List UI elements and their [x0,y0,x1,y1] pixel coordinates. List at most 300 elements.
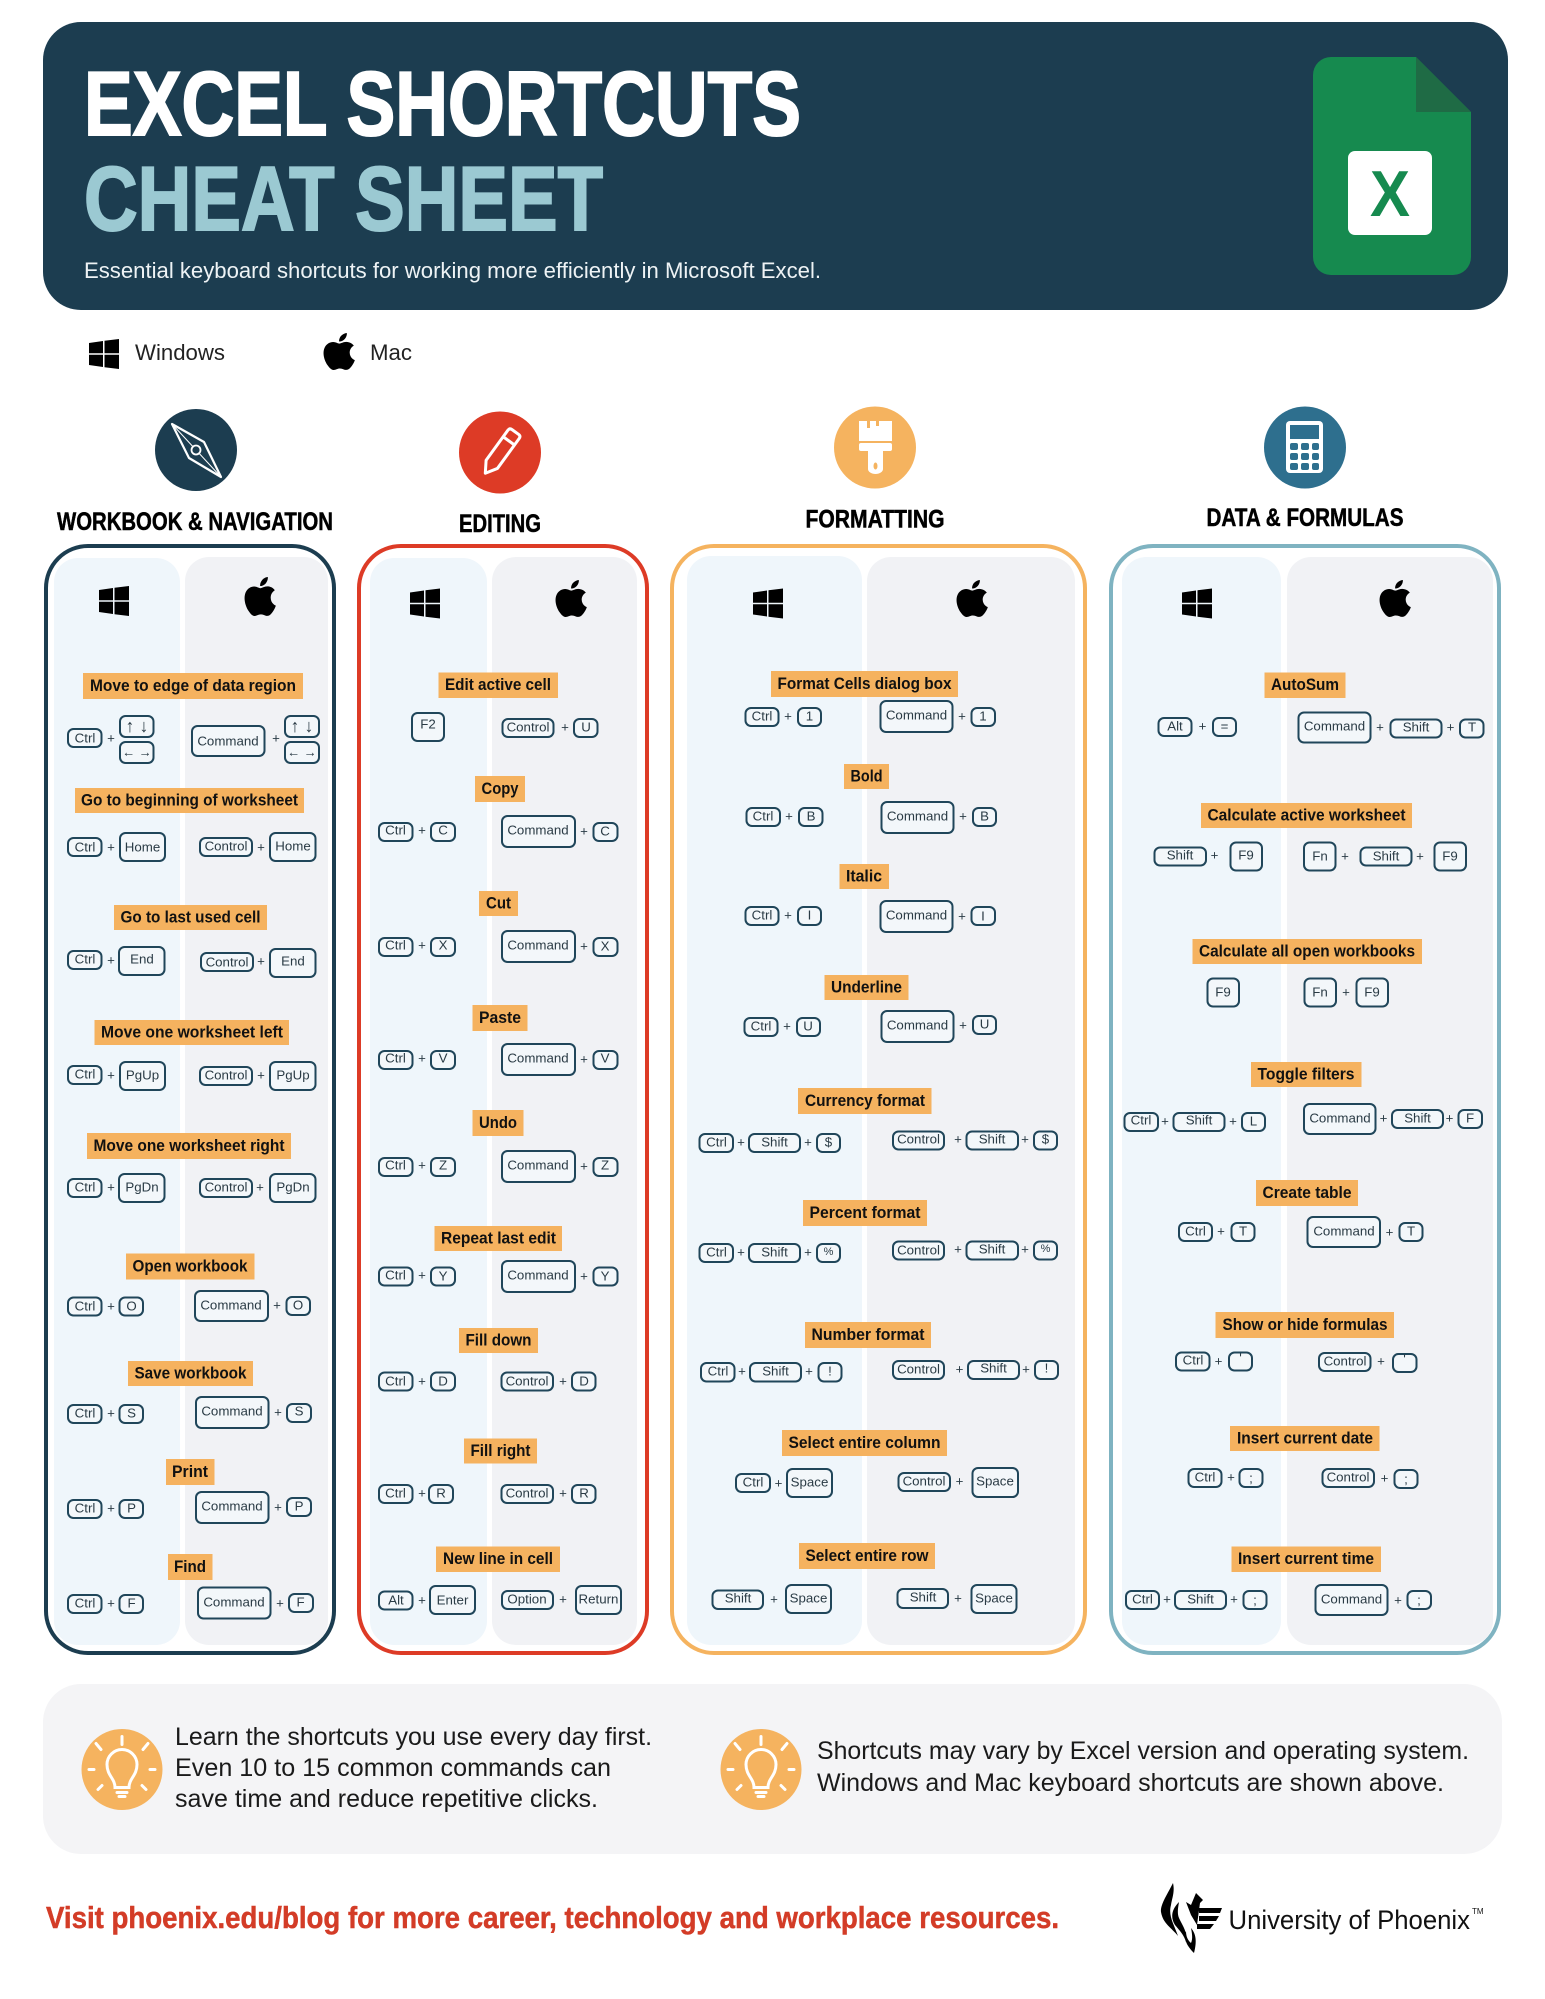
shortcut: format cells dialog box: + [784,708,792,724]
legend: windows and mac: Mac [370,340,412,365]
shortcut: calculate active worksheet: Shift [1373,848,1400,864]
shortcut: save workbook: S [295,1404,304,1418]
shortcut: move to edge of data region: ↑ ↓ [125,716,149,736]
shortcut: format cells dialog box: Command [886,708,947,722]
shortcut: autosum: = [1221,718,1229,734]
shortcut: copy: + [580,824,588,838]
shortcut: bold: + [785,808,793,824]
shortcut: insert current date: ; [1249,1470,1253,1486]
shortcut: fill right [379,1438,596,1503]
tip text 2 [817,1737,1469,1797]
shortcut: toggle filters: + [1161,1114,1169,1128]
icon: windows [1182,588,1212,618]
shortcut: save workbook: Command [201,1404,263,1418]
shortcut: cut: Cut [486,894,511,912]
heading: formatting: FORMATTING [806,506,944,534]
shortcut: number format: + [738,1364,746,1378]
shortcut: fill down: Ctrl [385,1374,406,1388]
tips panel [43,1684,1502,1854]
shortcut: number format: Shift [762,1364,789,1378]
shortcut: copy: C [600,824,610,838]
shortcut: show or hide formulas: ' [1239,1350,1242,1366]
heading: data and formulas: DATA & FORMULAS [1206,504,1404,532]
shortcut: repeat last edit [379,1226,618,1292]
shortcut: bold [746,764,996,833]
shortcut: repeat last edit: Y [601,1268,610,1284]
shortcut: undo: Undo [479,1114,517,1132]
shortcut: fill right: Fill right [470,1442,531,1460]
shortcut: fill down: + [559,1374,567,1388]
shortcut: fill down: + [418,1374,426,1388]
shortcut: calculate all open workbooks: F9 [1364,984,1380,1000]
shortcut: currency format: Currency format [805,1092,925,1110]
icon: compass [155,409,237,491]
shortcut: bold: Ctrl [753,808,773,824]
shortcut: select entire column: Ctrl [743,1474,763,1490]
shortcut: percent format: + [804,1244,812,1260]
shortcut: calculate all open workbooks [1192,939,1422,1006]
shortcut: paste: Ctrl [385,1050,406,1066]
shortcut: move one worksheet right: + [256,1180,264,1194]
shortcut: insert current date: + [1227,1470,1235,1484]
shortcut: move one worksheet left: + [107,1068,115,1082]
shortcut: save workbook: + [107,1406,115,1420]
shortcut: go to last used cell: End [130,952,154,966]
shortcut: cut: Ctrl [385,938,406,952]
shortcut: find: F [127,1596,136,1610]
legend: windows and mac: Windows [135,340,225,365]
shortcut: move to edge of data region: ← → [122,744,152,760]
shortcut: print [68,1459,311,1523]
shortcut: currency format [700,1088,1057,1152]
shortcut: go to last used cell: Ctrl [75,952,95,966]
shortcut: move to edge of data region: Move to edge of data region [90,677,296,695]
shortcut: autosum: AutoSum [1271,676,1339,694]
shortcut: copy: + [418,822,426,838]
subtitle: Essential keyboard shortcuts for working more efficiently in Microsoft Excel. [84,258,821,283]
shortcut: select entire column: Space [976,1474,1014,1488]
shortcut: calculate active worksheet [1154,803,1466,870]
shortcut: percent format: + [1021,1242,1029,1256]
shortcut: fill down [379,1328,596,1390]
shortcut: undo: + [418,1158,426,1172]
shortcut: go to last used cell: + [257,954,265,968]
shortcut: currency format: + [954,1132,962,1146]
icon: windows [410,588,440,618]
shortcut: open workbook: + [107,1298,115,1314]
shortcut: bold: B [807,808,816,824]
shortcut: insert current date: + [1381,1470,1389,1486]
shortcut: autosum: + [1447,720,1455,734]
icon: pencil [459,412,541,494]
shortcut: move to edge of data region: Ctrl [75,730,95,746]
shortcut: toggle filters: Shift [1186,1112,1213,1128]
shortcut: go to beginning of worksheet: Home [125,840,160,854]
shortcut: percent format: Percent format [810,1204,921,1222]
shortcut: fill right: Ctrl [385,1486,406,1500]
shortcut: move one worksheet left: Control [205,1068,247,1082]
shortcut: number format: ! [1045,1360,1048,1376]
shortcut: new line in cell: Enter [437,1592,469,1608]
logo: university of phoenix: University of Phoenix [1228,1905,1470,1935]
shortcut: calculate active worksheet: Fn [1312,848,1328,864]
shortcut: save workbook: Save workbook [134,1364,247,1382]
shortcut: paste: V [601,1050,610,1066]
shortcut: create table: + [1386,1224,1394,1240]
shortcut: cut: Command [507,938,569,952]
shortcut: italic [746,864,995,932]
shortcut: open workbook: O [293,1298,303,1312]
shortcut: percent format: Ctrl [706,1244,727,1260]
shortcut: undo: Ctrl [385,1158,406,1172]
shortcut: show or hide formulas: + [1377,1354,1385,1368]
shortcut: currency format: + [737,1134,745,1150]
shortcut: bold: B [980,808,989,824]
shortcut: print: P [295,1498,304,1514]
shortcut: toggle filters: Shift [1404,1110,1431,1126]
shortcut: select entire column: Space [791,1474,828,1490]
shortcut: insert current date [1188,1426,1418,1488]
shortcut: create table: Ctrl [1185,1224,1206,1238]
shortcut: calculate active worksheet: F9 [1442,848,1458,864]
shortcut: insert current time: Ctrl [1132,1592,1153,1606]
shortcut: new line in cell: Option [507,1592,547,1606]
shortcut: move one worksheet left: PgUp [126,1068,159,1082]
shortcut: print: Command [201,1498,263,1514]
shortcut: print: Ctrl [75,1500,95,1516]
shortcut: select entire column: Select entire column [788,1434,940,1452]
shortcut: insert current time: ; [1253,1592,1257,1608]
icon: calculator [1264,406,1346,488]
shortcut: percent format: % [1041,1243,1051,1255]
shortcut: select entire row: + [770,1592,778,1606]
icon: excel file: X [1370,157,1410,230]
shortcut: open workbook: + [273,1298,281,1312]
shortcut: calculate active worksheet: + [1416,848,1424,864]
shortcut: underline [744,975,996,1042]
shortcut: paste: V [439,1050,448,1066]
shortcut: undo: Z [439,1158,447,1172]
shortcut: print: + [274,1500,282,1514]
shortcut: move one worksheet right: Control [205,1180,247,1194]
shortcut: go to beginning of worksheet: Ctrl [75,840,95,854]
icon: apple [1380,580,1411,617]
shortcut: number format [701,1322,1058,1382]
shortcut: save workbook [68,1361,311,1428]
tip text 1: save time and reduce repetitive clicks. [175,1785,598,1813]
shortcut: paste [379,1005,618,1075]
shortcut: cut: X [439,938,448,952]
shortcut: format cells dialog box: 1 [806,708,813,724]
shortcut: move one worksheet right: Ctrl [75,1180,95,1194]
shortcut: insert current time: Shift [1187,1592,1214,1606]
shortcut: percent format: Shift [979,1242,1006,1256]
shortcut: number format: + [956,1362,964,1376]
shortcut: new line in cell: Return [579,1592,618,1606]
panel: data and formulas [1111,546,1499,1653]
shortcut: move to edge of data region: ↑ ↓ [290,716,314,736]
shortcut: italic: Command [886,908,947,922]
shortcut: show or hide formulas: + [1215,1354,1223,1368]
shortcut: go to last used cell: Control [206,954,248,970]
title line 2: CHEAT SHEET [84,149,603,250]
shortcut: go to beginning of worksheet: Go to beginning of worksheet [81,792,298,810]
shortcut: calculate active worksheet: Shift [1167,848,1194,862]
shortcut: paste: Paste [479,1009,521,1027]
shortcut: number format: Number format [812,1326,925,1344]
tip text 1: Even 10 to 15 common commands can [175,1754,611,1782]
shortcut: format cells dialog box [746,671,995,732]
shortcut: edit active cell: Control [507,720,549,734]
shortcut: undo: Z [601,1158,609,1172]
shortcut: move one worksheet right [68,1133,316,1202]
shortcut: new line in cell: + [559,1592,567,1606]
shortcut: format cells dialog box: Format Cells dialog box [778,675,952,693]
shortcut: copy: Copy [482,780,519,798]
shortcut: fill right: + [559,1486,567,1500]
shortcut: go to last used cell: + [107,952,115,968]
shortcut: underline: Command [887,1018,948,1032]
shortcut: repeat last edit: + [418,1268,426,1282]
shortcut: create table: Create table [1262,1184,1352,1202]
shortcut: edit active cell: Edit active cell [445,676,551,694]
shortcut: repeat last edit: Ctrl [385,1268,406,1282]
shortcut: create table [1179,1180,1422,1247]
shortcut: currency format: + [1021,1132,1029,1146]
shortcut: select entire row: Space [790,1590,827,1606]
legend: windows and mac [89,333,412,370]
shortcut: select entire row: Shift [725,1590,752,1606]
shortcut: underline: U [980,1016,989,1032]
shortcut: underline: + [959,1018,967,1032]
shortcut: italic: I [808,908,811,922]
shortcut: insert current time: Command [1321,1592,1382,1606]
shortcut: calculate active worksheet: + [1211,848,1219,862]
shortcut: insert current time: + [1230,1592,1238,1606]
shortcut: calculate active worksheet: F9 [1238,848,1254,862]
shortcut: new line in cell [379,1546,621,1614]
shortcut: toggle filters: F [1466,1110,1474,1126]
shortcut: percent format: % [824,1246,834,1258]
heading: editing: EDITING [459,510,541,538]
shortcut: find: + [276,1596,284,1610]
shortcut: go to last used cell: Go to last used cell [120,908,260,926]
shortcut: autosum: Shift [1403,720,1430,734]
icon: apple [556,580,587,617]
shortcut: show or hide formulas: Control [1324,1354,1366,1368]
shortcut: percent format: + [954,1242,962,1256]
shortcut: fill down: Control [506,1374,548,1388]
shortcut: cut: + [418,938,426,952]
shortcut: show or hide formulas [1176,1312,1416,1372]
icon: light bulb 2 [720,1729,802,1810]
shortcut: open workbook: Ctrl [75,1298,95,1314]
shortcut: currency format: + [804,1134,812,1150]
shortcut: edit active cell: F2 [420,716,436,732]
shortcut: go to last used cell [68,905,316,977]
shortcut: number format: Control [897,1362,940,1376]
shortcut: underline: + [783,1018,791,1034]
shortcut: paste: + [580,1052,588,1066]
shortcut: find: F [296,1594,305,1610]
shortcut: format cells dialog box: Ctrl [752,708,772,724]
icon: windows [753,588,783,618]
shortcut: move to edge of data region [68,673,319,763]
shortcut: fill down: Fill down [466,1332,532,1350]
shortcut: select entire row: Space [975,1590,1013,1606]
shortcut: cut: X [601,938,610,954]
logo: university of phoenix [1161,1883,1484,1953]
shortcut: autosum: T [1468,720,1476,734]
shortcut: move to edge of data region: + [107,730,115,746]
shortcut: percent format: + [737,1244,745,1260]
shortcut: italic: Ctrl [752,908,772,922]
shortcut: show or hide formulas: Ctrl [1183,1352,1203,1368]
shortcut: create table: T [1239,1224,1247,1238]
shortcut: underline: Underline [831,978,902,996]
shortcut: bold: Command [887,808,948,824]
shortcut: move one worksheet right: Move one worksheet right [94,1137,285,1155]
shortcut: number format: ! [828,1364,832,1378]
shortcut: copy: Command [507,822,569,838]
shortcut: insert current date: ; [1404,1472,1408,1486]
shortcut: find: Command [203,1594,265,1610]
shortcut: create table: Command [1313,1224,1375,1238]
shortcut: new line in cell: Alt [388,1592,404,1608]
shortcut: italic: Italic [846,868,882,886]
shortcut: cut [379,891,618,962]
panel: workbook and navigation [46,546,334,1653]
shortcut: move one worksheet right: + [107,1180,115,1194]
shortcut: toggle filters: + [1380,1110,1388,1126]
shortcut: percent format: Control [897,1242,940,1258]
shortcut: insert current time: Insert current time [1238,1550,1374,1568]
shortcut: open workbook: Open workbook [132,1258,248,1276]
shortcut: select entire column: + [775,1476,783,1490]
shortcut: save workbook: + [274,1404,282,1420]
shortcut: italic: + [958,908,966,924]
shortcut: move one worksheet left [68,1020,316,1090]
tip text 2: Shortcuts may vary by Excel version and operating system. [817,1737,1469,1765]
shortcut: find: Ctrl [75,1596,95,1610]
shortcut: go to beginning of worksheet [68,788,316,861]
shortcut: move one worksheet right: PgDn [276,1180,310,1194]
shortcut: show or hide formulas: Show or hide formulas [1222,1316,1388,1334]
shortcut: bold: + [959,808,967,824]
title line 1: EXCEL SHORTCUTS [84,54,801,155]
shortcut: number format: + [805,1364,813,1378]
shortcut: move one worksheet left: Move one worksheet left [101,1024,283,1042]
shortcut: calculate active worksheet: + [1341,848,1349,864]
icon: excel file [1313,57,1471,275]
shortcut: format cells dialog box: 1 [979,708,987,724]
shortcut: edit active cell: U [581,720,591,734]
shortcut: open workbook: Command [200,1298,262,1312]
shortcut: currency format: $ [825,1134,833,1150]
shortcut: edit active cell: + [561,720,569,734]
shortcut: move to edge of data region: + [272,730,280,746]
tip text 1: Learn the shortcuts you use every day first. [175,1723,652,1751]
shortcut: copy [379,776,618,847]
shortcut: paste: Command [507,1050,569,1066]
shortcut: repeat last edit: Repeat last edit [441,1230,556,1248]
shortcut: select entire column: + [956,1474,964,1488]
shortcut: calculate all open workbooks: F9 [1215,984,1231,1000]
tip text 2: Windows and Mac keyboard shortcuts are shown above. [817,1769,1444,1797]
shortcut: select entire row: + [954,1590,962,1606]
shortcut: toggle filters [1124,1062,1482,1134]
shortcut: new line in cell: New line in cell [443,1550,553,1568]
shortcut: italic: + [784,908,792,922]
shortcut: insert current time: ; [1417,1592,1421,1608]
shortcut: edit active cell [412,672,598,741]
shortcut: select entire column: Control [903,1474,945,1488]
shortcut: new line in cell: + [418,1592,426,1608]
shortcut: repeat last edit: + [580,1268,588,1284]
shortcut: autosum [1158,672,1484,742]
shortcut: autosum: Command [1304,718,1365,734]
icon: apple [245,577,276,616]
shortcut: print: + [107,1500,115,1516]
shortcut: insert current time: + [1163,1592,1171,1606]
shortcut: select entire row: Shift [910,1590,937,1604]
shortcut: autosum: + [1199,718,1207,734]
shortcut: format cells dialog box: + [958,708,966,724]
shortcut: undo: Command [507,1158,569,1172]
shortcut: print: P [127,1500,136,1516]
shortcut: toggle filters: L [1250,1114,1257,1128]
shortcut: fill right: Control [506,1486,548,1500]
logo: university of phoenix: TM [1472,1907,1484,1916]
shortcut: copy: Ctrl [385,822,406,838]
shortcut: go to last used cell: End [281,954,305,968]
shortcut: currency format: $ [1042,1132,1050,1146]
shortcut: find [68,1554,313,1618]
shortcut: number format: + [1022,1362,1030,1376]
shortcut: insert current date: Ctrl [1195,1470,1215,1484]
shortcut: autosum: + [1376,720,1384,734]
shortcut: copy: C [438,822,448,838]
shortcut: calculate all open workbooks: + [1342,984,1350,1000]
shortcut: currency format: Shift [979,1132,1006,1146]
shortcut: print: Print [172,1463,208,1481]
panel: formatting [672,546,1085,1653]
panel: editing [359,546,647,1653]
shortcut: fill down: D [579,1374,589,1388]
shortcut: show or hide formulas: ' [1403,1352,1406,1366]
shortcut: currency format: Control [897,1132,940,1146]
shortcut: insert current time: + [1394,1592,1402,1608]
shortcut: percent format: Shift [761,1244,788,1260]
icon: light bulb 1 [82,1729,162,1810]
shortcut: find: + [107,1596,115,1610]
footer call to action: Visit phoenix.edu/blog for more career, technology and workplace resources. [46,1900,1059,1935]
shortcut: select entire column [736,1430,1018,1497]
shortcut: calculate all open workbooks: Calculate all open workbooks [1199,942,1415,960]
header banner [43,22,1508,310]
tip text 1 [175,1723,652,1813]
icon: windows [99,586,129,616]
shortcut: toggle filters: Ctrl [1131,1112,1151,1128]
shortcut: cut: + [580,938,588,954]
shortcut: autosum: Alt [1167,718,1183,734]
shortcut: currency format: Ctrl [706,1134,727,1150]
shortcut: underline: U [803,1018,813,1034]
shortcut: insert current time [1126,1546,1431,1615]
shortcut: toggle filters: Command [1309,1110,1371,1126]
shortcut: insert current date: Insert current date [1237,1430,1373,1448]
shortcut: fill right: R [436,1486,446,1500]
